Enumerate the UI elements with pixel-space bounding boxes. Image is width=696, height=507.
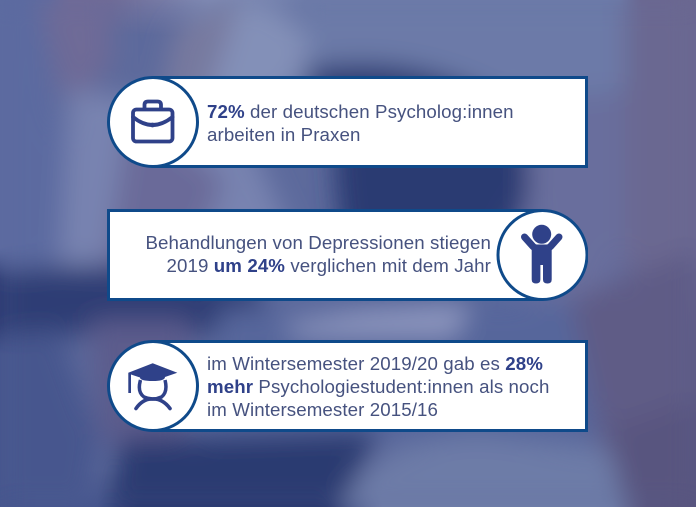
text: 28 Prozent mehr [207, 352, 549, 420]
panel: Psychologiestudierende [107, 340, 588, 432]
text: 28 Prozent mehr: im Wintersemester 2015/16 [207, 398, 438, 420]
text: um 24 Prozent [145, 232, 491, 276]
text: 72 Prozent [207, 100, 514, 144]
text: 72 Prozent: 72% der deutschen Psycholog:innen [207, 100, 514, 122]
icon: briefcase [133, 102, 172, 142]
text: 28 Prozent mehr: im Wintersemester 2019/20 gab es 28% [207, 352, 543, 374]
text: um 24 Prozent: 2019 um 24% verglichen mit dem Jahr [167, 254, 491, 276]
icon: child with raised arms [524, 225, 559, 284]
panel: Behandlungen von Depressionen [107, 209, 588, 301]
text: 28 Prozent mehr: mehr Psychologiestudent:innen als noch [207, 376, 549, 396]
panel: Psychologen in Praxen [107, 76, 588, 168]
text: um 24 Prozent: Behandlungen von Depressionen stiegen [145, 232, 491, 252]
icon: graduate with cap [128, 363, 177, 408]
text: 72 Prozent: arbeiten in Praxen [207, 124, 360, 144]
